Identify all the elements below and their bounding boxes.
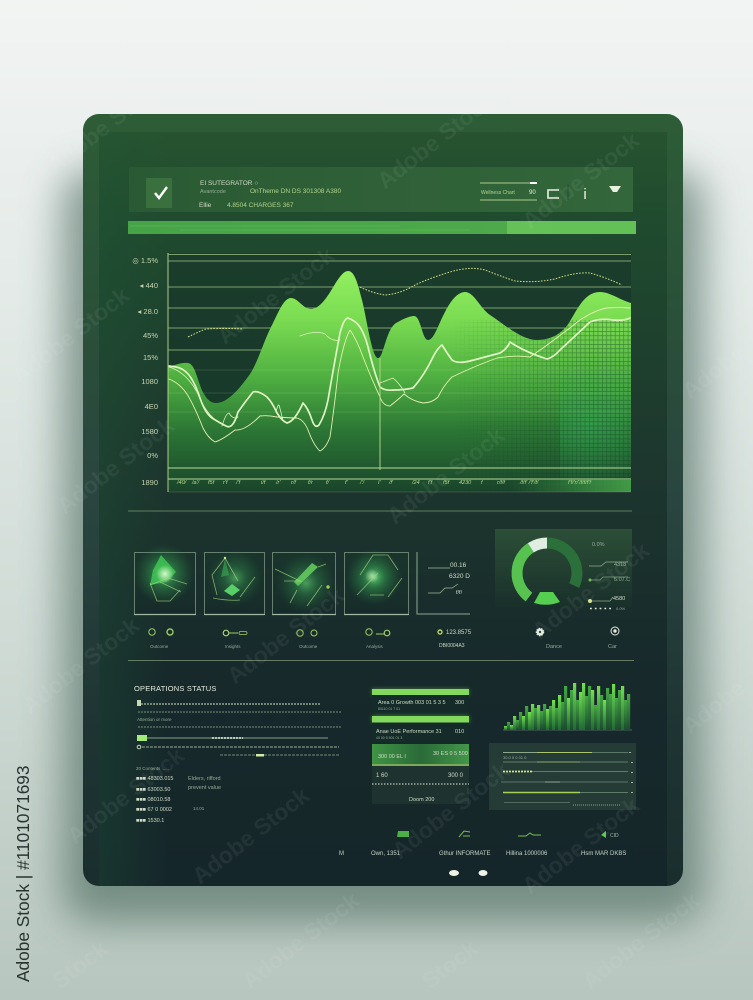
stock watermarks: Adobe Stock	[517, 127, 644, 234]
green progress bar	[128, 221, 636, 234]
donut chart	[517, 543, 577, 597]
numbered list	[136, 776, 174, 824]
x axis ticks: f'	[345, 480, 349, 486]
tile 3	[272, 552, 336, 614]
footer labels: Gthur INFORMATE	[439, 851, 491, 857]
grid texture on area	[450, 320, 631, 492]
donut labels	[588, 542, 630, 611]
y axis labels: 45%	[143, 331, 158, 340]
line meter panel	[489, 743, 636, 810]
metric 6: Dance	[546, 644, 562, 650]
footer labels	[339, 833, 626, 857]
metric 6	[536, 628, 562, 650]
stock watermarks: Stock	[47, 935, 113, 994]
stock watermarks: Adobe Stock	[237, 887, 364, 994]
metric 4: Analysis	[366, 644, 384, 649]
line series	[169, 308, 630, 451]
card 3: 30 ES 0 5 500	[433, 751, 468, 757]
icon: check box	[146, 178, 172, 208]
donut panel	[495, 529, 632, 611]
green area	[168, 271, 631, 492]
metric 3: Outcome	[299, 644, 318, 649]
header controls: Wellness Chart	[481, 190, 515, 196]
stock watermarks: Adobe Stock	[222, 582, 349, 689]
stock watermarks: Adobe Stock	[382, 422, 509, 529]
stock watermarks: Adobe Stock	[517, 792, 644, 899]
donut labels: 0.0%	[616, 606, 626, 611]
y axis labels: 15%	[143, 353, 158, 362]
operations list: Elders, rifford	[188, 776, 221, 782]
metric 1: Outcome	[150, 644, 169, 649]
stock watermarks: Adobe Stock	[527, 537, 654, 644]
card 3: Doom 200	[409, 797, 434, 803]
operations list: OPERATIONS STATUS	[134, 684, 217, 693]
bar chart	[503, 683, 632, 730]
header text	[199, 180, 341, 209]
operations list: prevent value	[188, 785, 221, 791]
icon: share	[601, 831, 606, 838]
x axis ticks: r'f	[223, 480, 228, 486]
numbered list: ■■■ 1530.1	[136, 818, 164, 824]
y axis labels: ◂ 440	[140, 281, 158, 290]
numbered list: ■■■ 48303.015	[136, 776, 174, 782]
x axis ticks: f/	[326, 480, 330, 486]
numbered list: ■■■ 63003.50	[136, 787, 170, 793]
x axis ticks: f5f	[208, 480, 215, 486]
card 1: 80110 01 7 01	[378, 707, 400, 711]
x axis ticks: i/f	[261, 480, 266, 486]
header text: Ellie	[199, 202, 212, 209]
header text: 4.8504 CHARGES 367	[227, 202, 294, 209]
footer labels: Hillina 1000006	[506, 851, 548, 857]
line meter panel: 30.0 5 0 01 0	[503, 755, 527, 760]
stock watermarks: Adobe Stock	[7, 282, 134, 389]
metric 4	[366, 629, 390, 649]
vertical stock credit: Adobe Stock | #1101071693	[13, 765, 33, 982]
stock watermarks: Adobe Stock	[52, 412, 179, 519]
operations list: 14.01	[193, 806, 205, 811]
stock watermarks: Adobe Stock	[187, 782, 314, 889]
y axis labels: 0%	[147, 451, 158, 460]
stock watermarks: Adobe Stock	[387, 757, 514, 864]
stock watermarks: Adobe Stock	[17, 612, 144, 719]
stock watermarks: Adobe	[677, 674, 749, 739]
metric 7	[608, 627, 619, 650]
card 3: 1 60	[376, 773, 388, 779]
card 2: 40 00 5 501 01 3	[376, 736, 402, 740]
header text: OnTheme DN DS 301308 A380	[250, 188, 341, 195]
x axis ticks: r/f/f	[497, 480, 505, 486]
footer labels: CID	[610, 833, 619, 839]
card 2: 010	[455, 729, 464, 735]
x axis ticks: /'f	[235, 480, 241, 486]
grid lines over area	[168, 370, 631, 412]
x axis ticks: f/r	[308, 480, 314, 486]
metric 2: Insights	[225, 644, 241, 649]
x axis ticks: I'	[378, 480, 382, 486]
metric 3	[297, 630, 318, 649]
card 3	[372, 744, 469, 804]
header text: Avantcode	[200, 189, 226, 195]
status cards	[372, 689, 469, 804]
stock watermarks: Stock	[662, 15, 728, 74]
stock watermarks: Stock	[327, 5, 393, 64]
metric 5	[438, 630, 472, 649]
x axis ticks: /'/	[359, 480, 365, 486]
card 2: Anae UoE Performance 31	[376, 729, 442, 735]
footer labels: M	[339, 851, 344, 857]
dotted trend lines	[188, 268, 622, 337]
x axis ticks: f'f	[428, 480, 433, 486]
icon: arrow	[459, 831, 470, 837]
dashboard panel	[83, 114, 683, 886]
tile 5 stats: f/f/	[456, 590, 463, 596]
tile 5 stats	[417, 552, 470, 614]
stock watermarks: Adobe	[677, 339, 749, 404]
x axis ticks: r/f	[291, 480, 296, 486]
tile 5 stats: 00.16	[450, 562, 467, 569]
tile 4	[344, 549, 409, 614]
x axis ticks: /40/	[176, 480, 187, 486]
operations list: 20 Contents ......	[136, 766, 169, 771]
card 2	[372, 716, 469, 742]
x axis ticks: f5f	[443, 480, 450, 486]
x axis ticks: f	[481, 480, 483, 486]
y axis labels: 4E0	[145, 402, 158, 411]
pager dots	[449, 870, 488, 876]
stock watermarks: Stock	[417, 935, 483, 994]
tile 1	[134, 544, 196, 614]
x axis ticks: f'f/'r/'/f/f/f'f	[568, 480, 591, 486]
divider	[128, 510, 632, 512]
operations list: Attention or more	[137, 717, 172, 722]
donut labels: 0.0%	[592, 542, 605, 548]
donut labels: 5.07.C	[614, 577, 630, 583]
stock watermarks: Adobe Stock	[577, 887, 704, 994]
footer icons	[397, 831, 606, 838]
metric 1	[149, 629, 173, 649]
x axis ticks: /f'	[388, 480, 394, 486]
card 1: 300	[455, 700, 464, 706]
metric icons row	[149, 627, 619, 650]
card 3: 300 00 EL I	[378, 754, 406, 760]
metric 5: DBI0004A3	[439, 643, 465, 649]
y axis labels	[132, 256, 158, 487]
stock watermarks: Adobe Stock	[62, 742, 189, 849]
donut wedge	[534, 592, 560, 605]
icon: card	[397, 831, 409, 837]
metric 2	[223, 630, 247, 649]
x axis ticks	[176, 480, 591, 486]
tile 5 stats: 6320 D	[449, 573, 470, 580]
y axis labels: ◂ 28.0	[138, 307, 158, 316]
stock watermarks: Adobe Stock	[42, 72, 169, 179]
header controls: 90	[529, 190, 536, 196]
x axis ticks: /24	[411, 480, 420, 486]
card 1: Area 0 Growth 003 01 5 3 5	[378, 700, 446, 706]
numbered list: ■■■ 67 0 0002	[136, 807, 172, 813]
y axis labels: ◎ 1.5%	[132, 256, 158, 265]
x axis ticks: /r'	[275, 480, 281, 486]
footer labels: Own, 1351	[371, 851, 401, 857]
header controls: i	[583, 186, 587, 203]
x axis ticks: 4230	[459, 480, 472, 486]
header strip	[129, 167, 633, 212]
header controls	[480, 182, 621, 203]
card 3: 300 0	[448, 773, 464, 779]
header text: EI SUTEGRATOR ○	[200, 180, 258, 187]
numbered list: ■■■ 08010.58	[136, 797, 170, 803]
donut labels: 4318	[614, 562, 626, 568]
stock watermarks: Adobe Stock	[372, 87, 499, 194]
donut labels: 4580	[613, 596, 625, 602]
stock watermarks: Adobe Stock	[212, 242, 339, 349]
y axis labels: 1580	[141, 427, 158, 436]
y axis labels: 1080	[141, 377, 158, 386]
main area chart	[168, 253, 631, 492]
x axis ticks: /a'/	[191, 480, 200, 486]
y axis labels: 1890	[141, 478, 158, 487]
card 1	[372, 689, 469, 715]
divider	[128, 660, 634, 662]
axes	[168, 253, 380, 492]
metric 7: Car	[608, 644, 617, 650]
status rows	[137, 700, 342, 756]
grid lines back	[168, 254, 631, 350]
footer labels: Hsm MAR DKBS	[581, 851, 626, 857]
metric 5: 123.8575	[446, 630, 472, 636]
icon: trend	[518, 833, 541, 836]
operations list	[134, 684, 342, 824]
tile 2	[204, 550, 265, 614]
x axis ticks: /f/f' /'f'/f/	[519, 480, 539, 486]
